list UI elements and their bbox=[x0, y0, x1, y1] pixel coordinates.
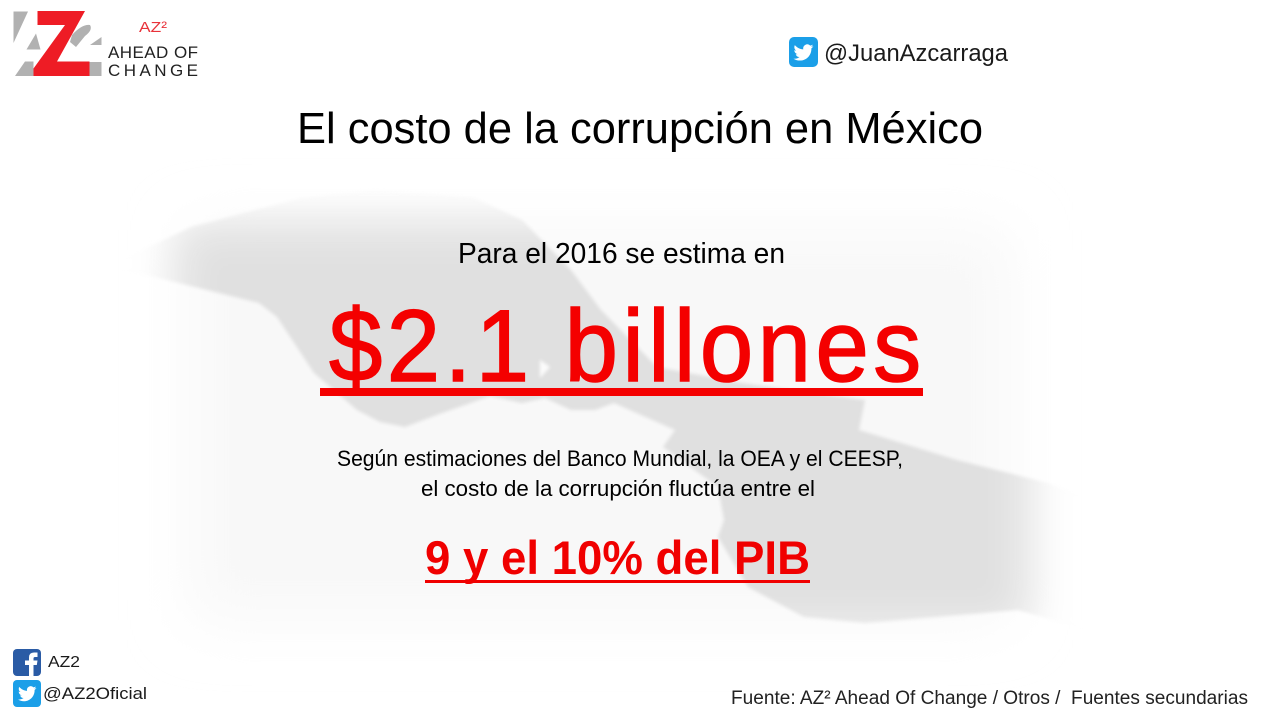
handle text: @JuanAzcarraga bbox=[824, 40, 1009, 67]
explanatory text: el costo de la corrupción fluctúa entre el bbox=[421, 476, 815, 501]
icon: facebook bbox=[13, 649, 41, 676]
explanatory text bbox=[337, 446, 903, 501]
logo text: Change: CHANGE bbox=[108, 61, 198, 80]
icon: twitter bbox=[789, 37, 818, 67]
source note: Fuente: AZ² Ahead Of Change / Otros / Fuentes secundarias bbox=[731, 688, 1248, 709]
logo: AZ2 Ahead of Change bbox=[14, 11, 198, 80]
twitter contact bbox=[13, 680, 147, 707]
icon: twitter bbox=[13, 680, 41, 707]
background image: handing over money between two hands bbox=[159, 206, 1046, 624]
logo text: AZ²: AZ² bbox=[139, 19, 167, 36]
title: El costo de la corrupción en México bbox=[297, 104, 983, 153]
explanatory text: Según estimaciones del Banco Mundial, la OEA y el CEESP, bbox=[337, 446, 903, 471]
facebook name: AZ2 bbox=[48, 654, 80, 671]
logo mark bbox=[14, 11, 102, 76]
intro text: Para el 2016 se estima en bbox=[458, 238, 785, 270]
logo text: Ahead of: AHEAD OF bbox=[108, 43, 198, 62]
main figure: $2.1 billones bbox=[329, 288, 921, 403]
highlighted percentage: 9 y el 10% del PIB bbox=[425, 531, 810, 584]
twitter name: @AZ2Oficial bbox=[43, 684, 147, 703]
facebook contact bbox=[13, 649, 80, 676]
twitter handle top bbox=[789, 37, 1009, 67]
